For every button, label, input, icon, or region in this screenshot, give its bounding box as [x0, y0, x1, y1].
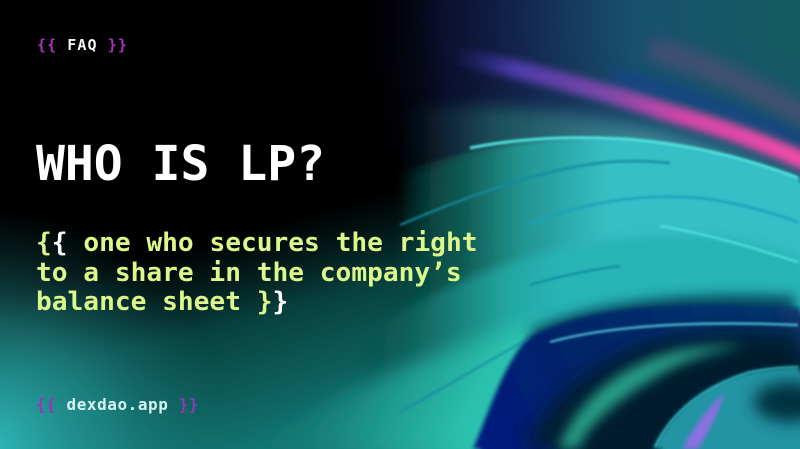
dark inner swirl: [525, 331, 800, 449]
shadow above navy swirl: [530, 294, 795, 340]
purple accent: [682, 393, 724, 449]
lighter mid sheet: [350, 235, 800, 449]
dark hollow in lower right: [754, 382, 800, 422]
top-right haze: [350, 0, 800, 449]
navy gap above the pink band: [610, 78, 800, 148]
bottom-left teal glow: [0, 200, 260, 449]
mid haze under pink band: [400, 106, 800, 230]
faint upper pink band: [650, 48, 800, 122]
lower left teal sheet: [250, 320, 540, 449]
title: WHO IS LP?: [36, 136, 325, 192]
green stripe: [558, 345, 745, 449]
teal lower-right swirl: [653, 367, 800, 449]
dark navy swirl: [473, 305, 800, 449]
definition text: {{ one who secures the right to a share in the company’s balance sheet }}: [36, 228, 477, 317]
label: FAQ: {{ FAQ }}: [37, 36, 128, 54]
wave highlights: [400, 138, 798, 447]
pink band: [455, 55, 800, 166]
cyan upper wave: [395, 138, 800, 449]
bottom-left teal gradient: [0, 170, 560, 449]
label: website: {{ dexdao.app }}: [36, 395, 199, 414]
